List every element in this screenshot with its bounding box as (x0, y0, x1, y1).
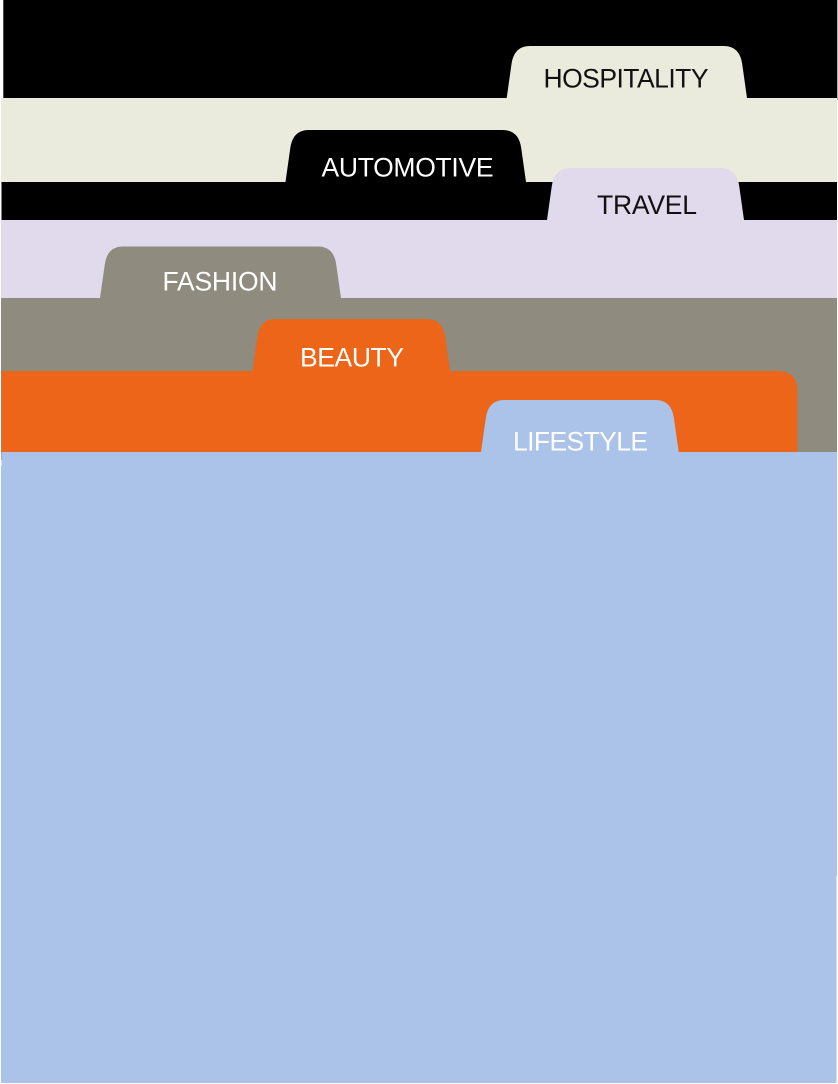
label: travel: TRAVEL (597, 190, 697, 220)
folder: hospitality (1, 46, 837, 184)
label: automotive: AUTOMOTIVE (322, 152, 494, 182)
folder: beauty (2, 319, 797, 460)
label: lifestyle: LIFESTYLE (513, 427, 648, 457)
folder: automotive (2, 130, 837, 222)
label: fashion: FASHION (162, 267, 278, 297)
label: hospitality: HOSPITALITY (544, 64, 709, 94)
label: beauty: BEAUTY (300, 343, 404, 373)
panel: black top folder (3, 0, 837, 100)
folder: fashion (1, 246, 837, 460)
folder: travel (1, 168, 837, 300)
